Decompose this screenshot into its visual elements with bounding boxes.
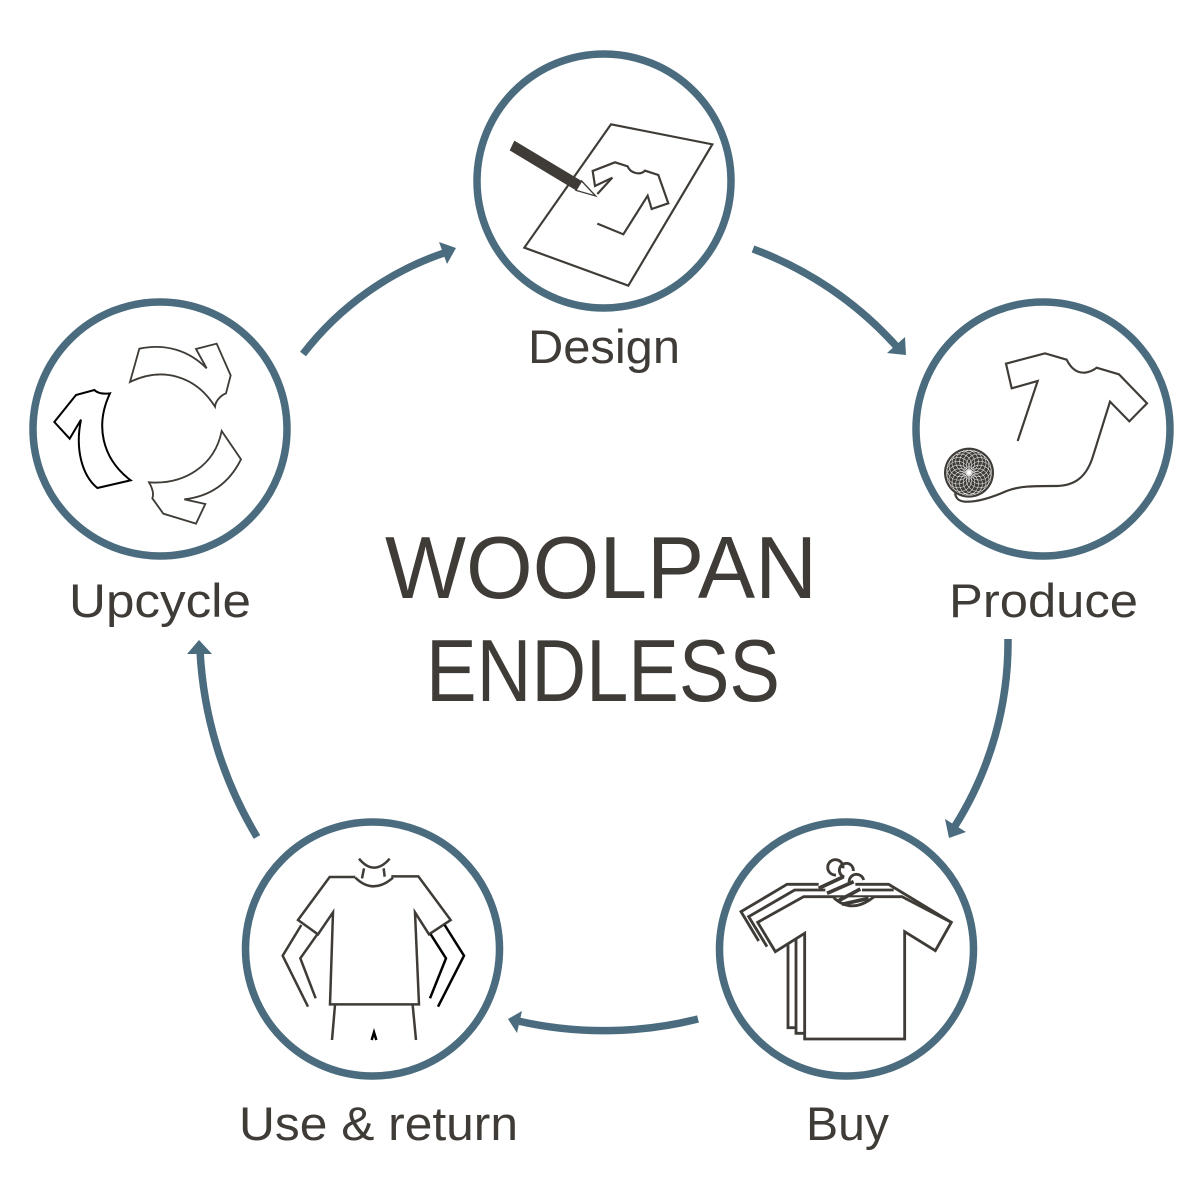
icon: t-shirt knitted from a ball of yarn bbox=[944, 353, 1147, 502]
title bbox=[385, 518, 817, 720]
panel: buy bbox=[720, 822, 974, 1150]
icon: t-shirts on hangers bbox=[741, 860, 951, 1039]
label: Buy: Buy bbox=[806, 1097, 889, 1150]
icon: pencil drawing a t-shirt on paper bbox=[510, 124, 712, 286]
arrow: buy to use and return bbox=[508, 1011, 698, 1033]
label: Use & return: Use & return bbox=[239, 1097, 518, 1150]
icon: person wearing a t-shirt bbox=[283, 859, 464, 1040]
panel: use and return bbox=[239, 822, 518, 1150]
label: Design: Design bbox=[528, 320, 680, 373]
label: Upcycle: Upcycle bbox=[69, 574, 251, 627]
label: Produce: Produce bbox=[949, 574, 1138, 627]
title: ENDLESS bbox=[426, 621, 780, 720]
panel: produce bbox=[916, 302, 1170, 627]
panel: design bbox=[477, 54, 731, 373]
arrow: produce to buy bbox=[945, 639, 1008, 838]
icon: three t-shirts forming a recycling loop bbox=[54, 344, 241, 524]
panel: upcycle bbox=[33, 302, 287, 627]
title: WOOLPAN bbox=[385, 518, 817, 617]
arrow: upcycle to design bbox=[303, 242, 456, 354]
arrow: design to produce bbox=[753, 249, 906, 355]
arrow: use and return to upcycle bbox=[187, 640, 257, 837]
